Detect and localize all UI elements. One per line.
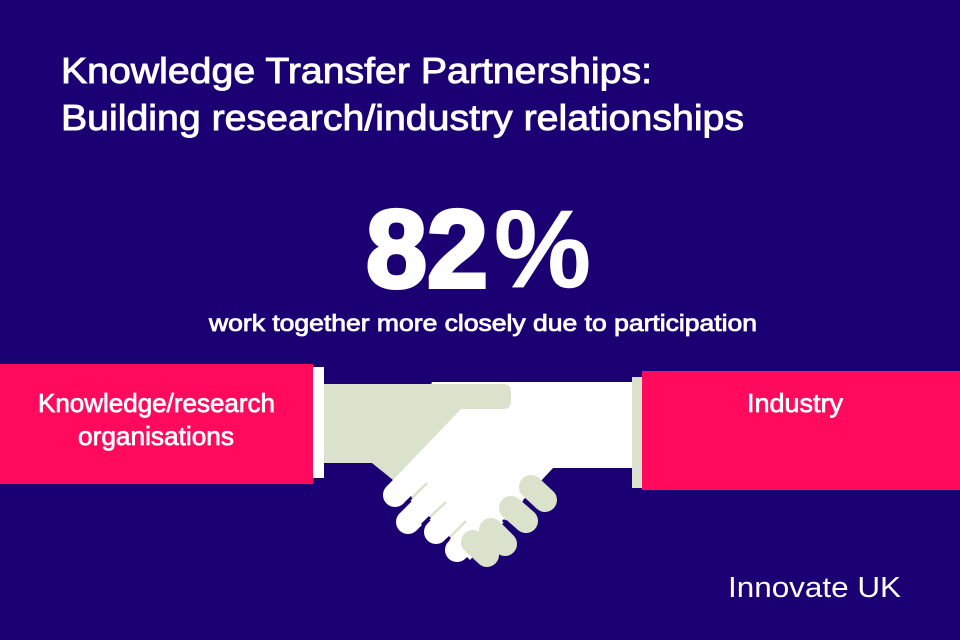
- green finger creases: [412, 483, 466, 537]
- right sleeve: [632, 371, 960, 490]
- left sleeve label: [38, 388, 275, 451]
- left hand fingers: [473, 487, 545, 555]
- handshake icon: [324, 382, 632, 560]
- statistic caption: work together more closely due to participation: [208, 310, 757, 336]
- finger gaps: [405, 497, 450, 544]
- left arm and thumb: [324, 384, 511, 480]
- right sleeve label: Industry: [747, 388, 843, 418]
- big statistic: %: [494, 188, 591, 311]
- right arm and hand: [392, 382, 632, 560]
- right-hand finger gaps: [503, 499, 537, 533]
- title: Knowledge Transfer Partnerships:: [61, 50, 652, 91]
- left sleeve label: Knowledge/research: [38, 388, 275, 418]
- logo: Innovate UK: Innovate UK: [728, 572, 902, 604]
- title: [61, 50, 744, 138]
- big statistic: [366, 188, 591, 311]
- left sleeve label: organisations: [78, 421, 234, 451]
- left sleeve: [0, 364, 324, 484]
- big statistic: 82: [366, 188, 488, 311]
- title: Building research/industry relationships: [61, 97, 744, 138]
